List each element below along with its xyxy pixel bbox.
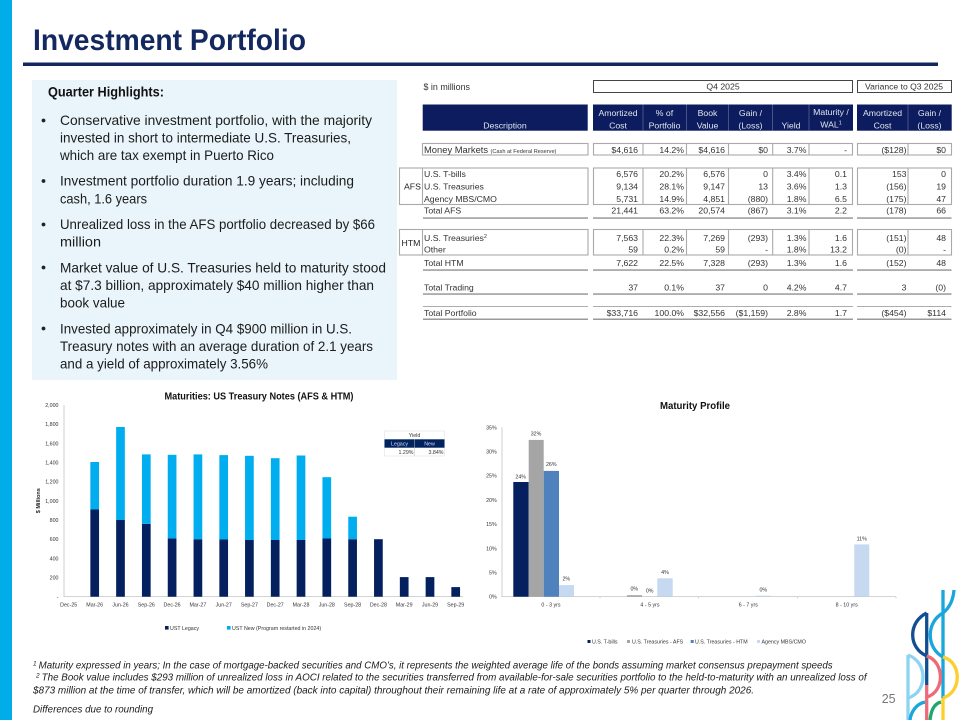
y axis: 600 — [50, 537, 59, 543]
row: U.S. T-bills: 3.4% — [787, 169, 807, 179]
axes and y labels — [486, 425, 896, 601]
axes and y labels: 30% — [486, 450, 497, 456]
x axis labels: Sep-27 — [241, 602, 258, 608]
row: agency MBS/CMO: 1.8% — [787, 194, 807, 204]
x axis labels: Mar-26 — [86, 602, 103, 608]
bullet list: Conservative investment portfolio, with the majority — [60, 112, 372, 128]
table column headers: Amortized — [598, 108, 638, 118]
data labels: 0% — [630, 587, 638, 593]
row: money markets: $0 — [936, 145, 946, 155]
x axis labels: Mar-28 — [293, 602, 309, 608]
y axis: 800 — [50, 518, 59, 524]
row: money markets — [611, 145, 946, 155]
x axis labels: Jun-27 — [216, 602, 232, 608]
row: total trading: 0 — [763, 283, 768, 293]
chart: maturities US treasury notes — [36, 392, 464, 632]
data labels: 26% — [546, 462, 557, 468]
period header: variance to Q3 2025: Variance to Q3 2025 — [865, 82, 943, 92]
x axis labels: Dec-26 — [164, 602, 181, 608]
row: total portfolio: 2.8% — [787, 308, 807, 318]
period header: Q4 2025 — [594, 80, 852, 92]
table column headers: % of — [656, 108, 674, 118]
x axis labels: Dec-28 — [370, 602, 387, 608]
category labels: 4 - 5 yrs — [640, 603, 660, 609]
row: total trading: 3 — [902, 283, 907, 293]
category labels: 0 - 3 yrs — [541, 603, 561, 609]
row: U.S. Treasuries AFS: 9,134 — [616, 182, 638, 192]
row: total portfolio — [607, 308, 946, 318]
row: total trading: 4.7 — [835, 283, 847, 293]
footnotes — [32, 660, 868, 716]
yield inset table: 1.29% — [398, 450, 414, 456]
row: U.S. T-bills: 0.1 — [835, 169, 847, 179]
row: agency MBS/CMO: 4,851 — [703, 194, 725, 204]
data labels: 24% — [515, 474, 526, 480]
row labels: Money Markets (Cash at Federal Reserve) — [424, 144, 557, 155]
row: U.S. T-bills: 20.2% — [659, 169, 684, 179]
table units label: $ in millions — [424, 82, 470, 92]
bullet list: Investment portfolio duration 1.9 years; including — [60, 173, 354, 189]
row: U.S. T-bills: 153 — [892, 169, 907, 179]
row: money markets: $0 — [758, 145, 768, 155]
row labels: Total Trading — [424, 283, 474, 293]
row: agency MBS/CMO: (880) — [748, 194, 768, 204]
footnote 1: Maturity expressed in years; In the case of mortgage-backed securities and CMO’s, it represents the weighted average life of the bonds assuming market consensus prepayment speeds — [39, 660, 833, 671]
table column headers: WAL — [820, 120, 839, 130]
row: U.S. Treasuries AFS: 9,147 — [703, 182, 725, 192]
row: U.S. Treasuries HTM: 48 — [936, 233, 946, 243]
row: agency MBS/CMO: 5,731 — [616, 194, 638, 204]
row: total portfolio: $33,716 — [607, 308, 638, 318]
row: total trading: 4.2% — [787, 283, 807, 293]
group labels AFS and HTM — [402, 182, 421, 248]
row: total HTM: 22.5% — [659, 258, 684, 268]
row: agency MBS/CMO: 47 — [936, 194, 946, 204]
new program bars — [90, 427, 357, 540]
chart: maturity profile — [486, 401, 896, 645]
group labels AFS and HTM: HTM — [402, 238, 420, 248]
row: U.S. T-bills: 6,576 — [703, 169, 725, 179]
row: total portfolio: ($1,159) — [736, 308, 768, 318]
row: other: - — [943, 245, 946, 255]
y axis: 1,800 — [45, 422, 59, 428]
row: U.S. Treasuries AFS — [616, 182, 946, 192]
chart legend — [588, 639, 806, 645]
axes and y labels: 10% — [486, 546, 497, 552]
row: U.S. Treasuries HTM: 1.6 — [835, 233, 847, 243]
row: U.S. Treasuries AFS: 13 — [758, 182, 768, 192]
legacy bars — [90, 510, 460, 597]
row: U.S. T-bills: 0 — [763, 169, 768, 179]
y axis: - — [57, 595, 59, 601]
axes and y labels: 35% — [486, 425, 497, 431]
row: money markets: $4,616 — [698, 145, 725, 155]
y axis label: $ Millions — [36, 488, 42, 513]
row labels: Agency MBS/CMO — [424, 194, 497, 204]
table column headers: Description — [483, 120, 527, 130]
row: agency MBS/CMO — [616, 194, 946, 204]
bars: agency MBS/CMO — [559, 544, 869, 597]
y axis: 200 — [50, 576, 59, 582]
x axis labels: Mar-29 — [396, 602, 413, 608]
row: other: 1.8% — [787, 245, 807, 255]
chart legend: U.S. Treasuries - AFS — [632, 639, 684, 645]
table column headers: Gain / — [918, 108, 942, 118]
row: total portfolio: $32,556 — [694, 308, 725, 318]
data labels — [515, 431, 867, 594]
chart legend: UST Legacy — [170, 626, 199, 632]
table column headers: Maturity / — [813, 107, 849, 117]
y axis: 2,000 — [45, 403, 59, 409]
data labels: 2% — [562, 577, 570, 583]
table column headers — [423, 104, 952, 131]
x axis labels: Dec-25 — [60, 602, 77, 608]
axes and y labels: 25% — [486, 474, 497, 480]
chart legend: UST New (Program restarted in 2024) — [232, 626, 321, 632]
row: U.S. Treasuries AFS: 3.6% — [787, 182, 807, 192]
footnote 2: The Book value includes $293 million of unrealized loss in AOCI related to the securities transferred from available-for-sale securities portfolio to the held-to-maturity with an unrealized loss of — [42, 673, 868, 684]
row: money markets: 3.7% — [787, 145, 807, 155]
row: total HTM: 7,622 — [616, 258, 638, 268]
row: U.S. Treasuries HTM: 7,563 — [616, 233, 638, 243]
period header: Q4 2025: Q4 2025 — [706, 82, 740, 92]
table column headers: (Loss) — [738, 120, 763, 130]
table column headers: 1 — [839, 121, 842, 127]
table column headers: Gain / — [739, 108, 763, 118]
data labels: 11% — [857, 536, 867, 542]
x axis labels: Sep-29 — [447, 602, 464, 608]
chart title: Maturities: US Treasury Notes (AFS & HTM) — [164, 392, 354, 403]
row: total trading — [628, 283, 946, 293]
row: total AFS: (178) — [886, 205, 907, 215]
bullet list: Market value of U.S. Treasuries held to maturity stood — [60, 259, 386, 275]
bullet list: cash, 1.6 years — [60, 190, 147, 206]
y axis: 400 — [50, 556, 59, 562]
yield inset table: Legacy — [391, 442, 408, 448]
heading: quarter highlights: Quarter Highlights: — [48, 84, 164, 100]
table column headers: Cost — [609, 120, 628, 130]
y axis: 1,400 — [45, 460, 59, 466]
row: total trading: 37 — [715, 283, 725, 293]
footnote 2: 2 — [35, 673, 40, 680]
row: agency MBS/CMO: 14.9% — [659, 194, 684, 204]
bullet list: invested in short to intermediate U.S. Treasuries, — [60, 130, 351, 146]
row: U.S. Treasuries HTM: (293) — [748, 233, 768, 243]
bullet list: Unrealized loss in the AFS portfolio decreased by $66 — [60, 216, 375, 232]
bullet list: Invested approximately in Q4 $900 million in U.S. — [60, 320, 352, 336]
row: money markets: ($128) — [881, 145, 907, 155]
table column headers: Cost — [874, 120, 892, 130]
row: U.S. T-bills — [616, 169, 946, 179]
table column headers: Portfolio — [649, 120, 681, 130]
row: total AFS: 66 — [936, 205, 946, 215]
bullet list: million — [60, 235, 101, 250]
row labels: Total Portfolio — [424, 308, 477, 318]
y axis — [45, 403, 463, 601]
row labels: 2 — [484, 234, 487, 240]
row: other: 0.2% — [664, 245, 684, 255]
bullet list: at $7.3 billion, approximately $40 million higher than — [60, 277, 374, 293]
row: agency MBS/CMO: (175) — [886, 194, 907, 204]
chart title: Maturity Profile — [660, 401, 730, 412]
row: total HTM: 1.6 — [835, 258, 847, 268]
data labels: 32% — [531, 431, 542, 437]
row labels: Other — [424, 245, 446, 255]
table column headers: Amortized — [863, 108, 902, 118]
row: other: 59 — [715, 245, 725, 255]
row: other: 13.2 — [830, 245, 847, 255]
bullet list — [42, 112, 386, 371]
row: total AFS: 21,441 — [611, 205, 638, 215]
x axis labels: Sep-28 — [344, 602, 361, 608]
x axis labels — [60, 602, 464, 608]
row: U.S. T-bills: 0 — [941, 169, 946, 179]
left accent sidebar — [0, 0, 12, 720]
row: total trading: (0) — [935, 283, 946, 293]
logo: decorative musical arcs — [908, 590, 957, 720]
row: total trading: 37 — [628, 283, 638, 293]
row: money markets: - — [844, 145, 847, 155]
row group frames — [400, 144, 952, 255]
chart legend: Agency MBS/CMO — [762, 639, 806, 645]
investment portfolio table — [400, 80, 952, 320]
x axis labels: Jun-28 — [319, 602, 335, 608]
row: total portfolio: 100.0% — [655, 308, 684, 318]
row: other — [628, 245, 946, 255]
row: U.S. Treasuries HTM: 1.3% — [787, 233, 807, 243]
data labels: 4% — [661, 570, 669, 576]
row: total AFS: 3.1% — [787, 205, 807, 215]
row: total HTM: 1.3% — [787, 258, 807, 268]
row labels — [424, 144, 557, 318]
table column headers: Value — [697, 120, 718, 130]
row: agency MBS/CMO: 6.5 — [835, 194, 847, 204]
bars: U.S. T-bills — [513, 482, 529, 597]
axes and y labels: 0% — [489, 595, 497, 601]
data labels: 0% — [759, 588, 767, 594]
bullet list: and a yield of approximately 3.56% — [60, 355, 268, 371]
bullet list: Treasury notes with an average duration of 2.1 years — [60, 338, 373, 354]
row: U.S. Treasuries AFS: (156) — [886, 182, 907, 192]
bullet list: which are tax exempt in Puerto Rico — [59, 147, 274, 163]
row: total HTM: 48 — [936, 258, 946, 268]
y axis: 1,000 — [45, 499, 59, 505]
category labels: 6 - 7 yrs — [739, 603, 758, 609]
chart legend — [165, 626, 321, 632]
row: total AFS: 2.2 — [835, 205, 847, 215]
row: U.S. Treasuries HTM: 22.3% — [659, 233, 684, 243]
row: total portfolio: 1.7 — [835, 308, 847, 318]
row: other: - — [765, 245, 768, 255]
row: total portfolio: $114 — [927, 308, 946, 318]
row: other: 59 — [628, 245, 638, 255]
x axis labels: Dec-27 — [267, 602, 284, 608]
title — [23, 24, 938, 66]
yield inset table: 3.84% — [428, 450, 444, 456]
panel: quarter highlights — [32, 80, 397, 380]
bars: U.S. Treasuries AFS — [529, 440, 642, 597]
row: money markets: 14.2% — [659, 145, 684, 155]
x axis labels: Jun-26 — [112, 602, 129, 608]
yield inset table: Yield — [409, 433, 420, 439]
row: U.S. T-bills: 6,576 — [616, 169, 638, 179]
chart legend: U.S. T-bills — [592, 639, 618, 645]
chart legend: U.S. Treasuries - HTM — [695, 639, 748, 645]
row: total AFS: 20,574 — [698, 205, 725, 215]
row: total AFS: (867) — [748, 205, 768, 215]
row: U.S. Treasuries HTM — [616, 233, 946, 243]
axes and y labels: 15% — [486, 522, 497, 528]
footnote 2 continued: $873 million at the time of transfer, which will be amortized (back into capital) throughout their remaining life at a rate of approximately 5% per quarter through 2026. — [32, 685, 754, 696]
table column headers: Book — [698, 108, 718, 118]
yield inset table — [384, 431, 444, 456]
row: other: (0) — [896, 245, 907, 255]
row: money markets: $4,616 — [611, 145, 638, 155]
row: U.S. Treasuries AFS: 28.1% — [659, 182, 684, 192]
row: U.S. Treasuries AFS: 19 — [936, 182, 946, 192]
row: total HTM: 7,328 — [703, 258, 725, 268]
bars: U.S. Treasuries HTM — [544, 471, 559, 597]
y axis: 1,200 — [45, 480, 59, 486]
row labels: Total HTM — [424, 258, 464, 268]
row labels: U.S. Treasuries — [424, 233, 484, 243]
axes and y labels: 5% — [489, 570, 497, 576]
footnote 1: 1 — [33, 660, 37, 667]
bullet list: book value — [60, 294, 125, 310]
x axis labels: Jun-29 — [422, 602, 438, 608]
row: total AFS — [611, 205, 946, 215]
row labels: Total AFS — [424, 205, 461, 215]
data labels: 0% — [646, 588, 654, 594]
row: total HTM: (293) — [748, 258, 768, 268]
row: total AFS: 63.2% — [659, 205, 684, 215]
yield inset table: New — [424, 442, 435, 448]
rounding note: Differences due to rounding — [33, 704, 153, 716]
x axis labels: Mar-27 — [190, 602, 206, 608]
row: total HTM: (152) — [886, 258, 907, 268]
title: Investment Portfolio — [33, 24, 306, 57]
table column headers: (Loss) — [917, 120, 942, 130]
page number: 25 — [882, 692, 896, 706]
row: U.S. Treasuries HTM: (151) — [886, 233, 907, 243]
row labels: U.S. T-bills — [424, 169, 466, 179]
category labels — [541, 603, 858, 609]
total rules — [423, 217, 952, 320]
axes and y labels: 20% — [486, 498, 497, 504]
row: total portfolio: ($454) — [881, 308, 907, 318]
row labels: U.S. Treasuries — [424, 182, 485, 192]
row: U.S. Treasuries AFS: 1.3 — [835, 182, 847, 192]
row: U.S. Treasuries HTM: 7,269 — [703, 233, 725, 243]
row: total HTM — [616, 258, 946, 268]
y axis: 1,600 — [45, 441, 59, 447]
row: total trading: 0.1% — [664, 283, 684, 293]
x axis labels: Sep-26 — [138, 602, 155, 608]
group labels AFS and HTM: AFS — [404, 182, 421, 192]
table column headers: Yield — [782, 120, 801, 130]
category labels: 8 - 10 yrs — [836, 603, 858, 609]
